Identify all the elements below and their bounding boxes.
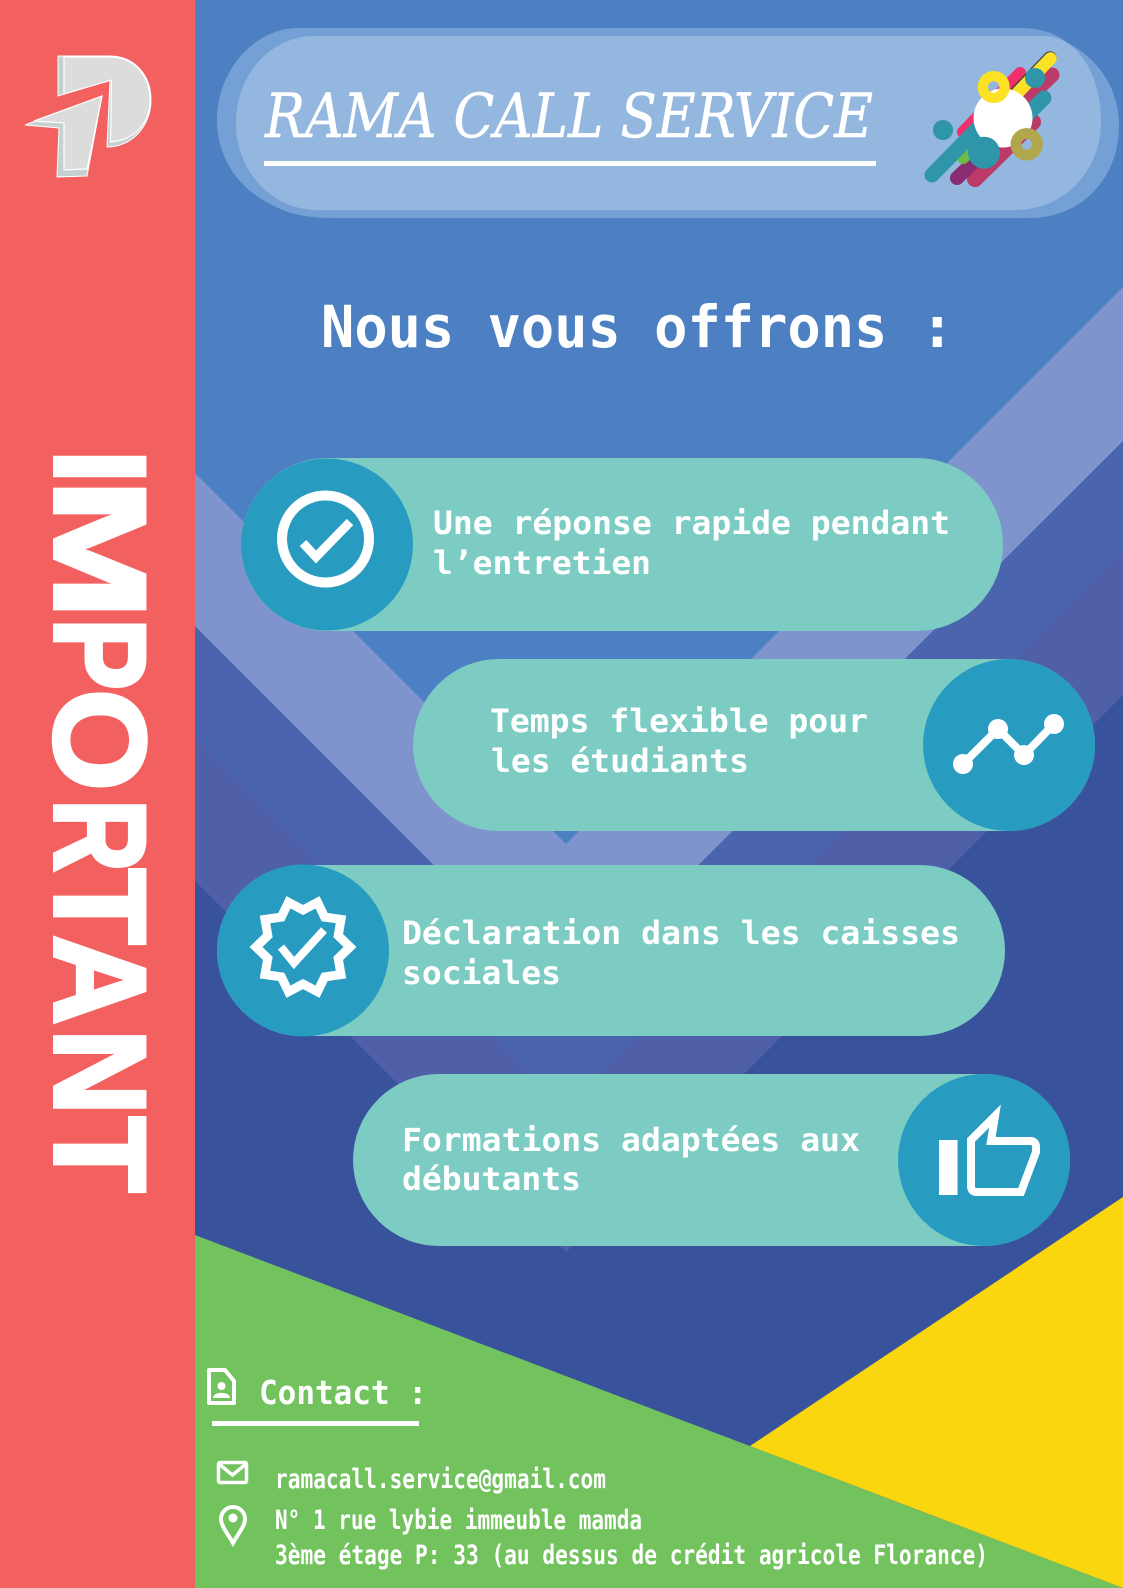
- benefit 3 text: sociales: [402, 954, 561, 992]
- benefit 2 text: Temps flexible pour: [490, 702, 868, 740]
- benefit 1 text: Une réponse rapide pendant: [433, 504, 950, 542]
- vertical heading: IMPORTANT: T: [27, 1116, 173, 1192]
- icon: thumbs up: [898, 1074, 1070, 1246]
- panel: benefit 2: [413, 659, 1095, 831]
- icon: verified badge: [217, 864, 389, 1036]
- address: [275, 1505, 988, 1571]
- vertical heading: IMPORTANT: O: [27, 689, 173, 791]
- vertical heading: IMPORTANT: R: [27, 799, 173, 872]
- benefit 3 text: [402, 914, 960, 992]
- vertical heading: IMPORTANT: A: [27, 935, 173, 1025]
- yellow corner shape: [750, 1197, 1123, 1588]
- benefit 4 text: [402, 1121, 860, 1198]
- benefit 4 text: Formations adaptées aux: [402, 1121, 860, 1159]
- icon: contact document: [209, 1370, 234, 1403]
- logo: [25, 56, 151, 177]
- icon: line chart: [923, 659, 1095, 831]
- heading: Nous vous offrons: Nous vous offrons :: [321, 293, 954, 361]
- vertical heading: IMPORTANT: P: [27, 618, 173, 690]
- benefit 1 text: [433, 504, 950, 582]
- contact heading: Contact :: [259, 1373, 427, 1412]
- green corner shape: [195, 1235, 1123, 1588]
- vertical heading: IMPORTANT: M: [27, 479, 173, 619]
- benefit 1 text: l’entretien: [433, 544, 651, 582]
- benefit 2 text: les étudiants: [491, 742, 749, 780]
- email: ramacall.service@gmail.com: [275, 1464, 606, 1495]
- icon: mail: [218, 1462, 246, 1482]
- panel: benefit 3: [217, 864, 1005, 1036]
- address: N° 1 rue lybie immeuble mamda: [275, 1505, 642, 1536]
- title: RAMA CALL SERVICE: [264, 81, 873, 152]
- title underline: [264, 161, 876, 166]
- panel: benefit 4: [353, 1074, 1070, 1246]
- icon: colourful decoration: [932, 58, 1052, 179]
- panel: benefit 1: [241, 458, 1003, 631]
- benefit 2 text: [490, 702, 868, 780]
- vertical heading: IMPORTANT: I: [27, 450, 173, 484]
- icon: location pin: [221, 1507, 245, 1543]
- contact underline: [212, 1421, 419, 1426]
- benefit 3 text: Déclaration dans les caisses: [402, 914, 960, 952]
- benefit 4 text: débutants: [402, 1160, 581, 1198]
- panel: contact: [209, 1370, 988, 1571]
- icon: check circle: [241, 458, 413, 630]
- vertical heading: IMPORTANT: N: [27, 1029, 173, 1115]
- panel: title banner: [217, 28, 1119, 218]
- panel: red sidebar: [0, 0, 195, 1588]
- vertical heading: IMPORTANT: T: [27, 868, 173, 944]
